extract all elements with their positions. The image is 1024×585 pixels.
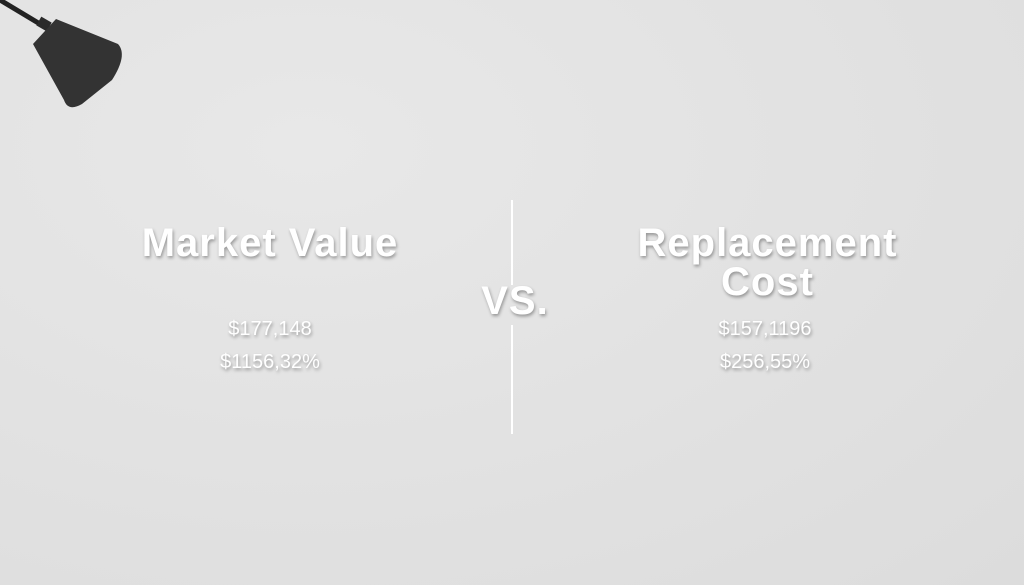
values: replacement cost: $256,55% bbox=[720, 351, 810, 373]
heading: Replacement Cost: Cost bbox=[721, 260, 814, 304]
icon: desk lamp bbox=[0, 0, 122, 108]
values: market value: $1156,32% bbox=[220, 351, 320, 373]
values: replacement cost bbox=[718, 318, 814, 373]
heading: Market Value: Market Value bbox=[142, 221, 398, 265]
values: market value bbox=[220, 318, 322, 373]
vs label: VS. bbox=[481, 279, 549, 323]
values: market value: $177,148 bbox=[228, 318, 312, 340]
heading: Replacement Cost bbox=[638, 221, 898, 304]
values: replacement cost: $157,1196 bbox=[718, 318, 812, 340]
heading: Replacement Cost: Replacement bbox=[638, 221, 897, 265]
